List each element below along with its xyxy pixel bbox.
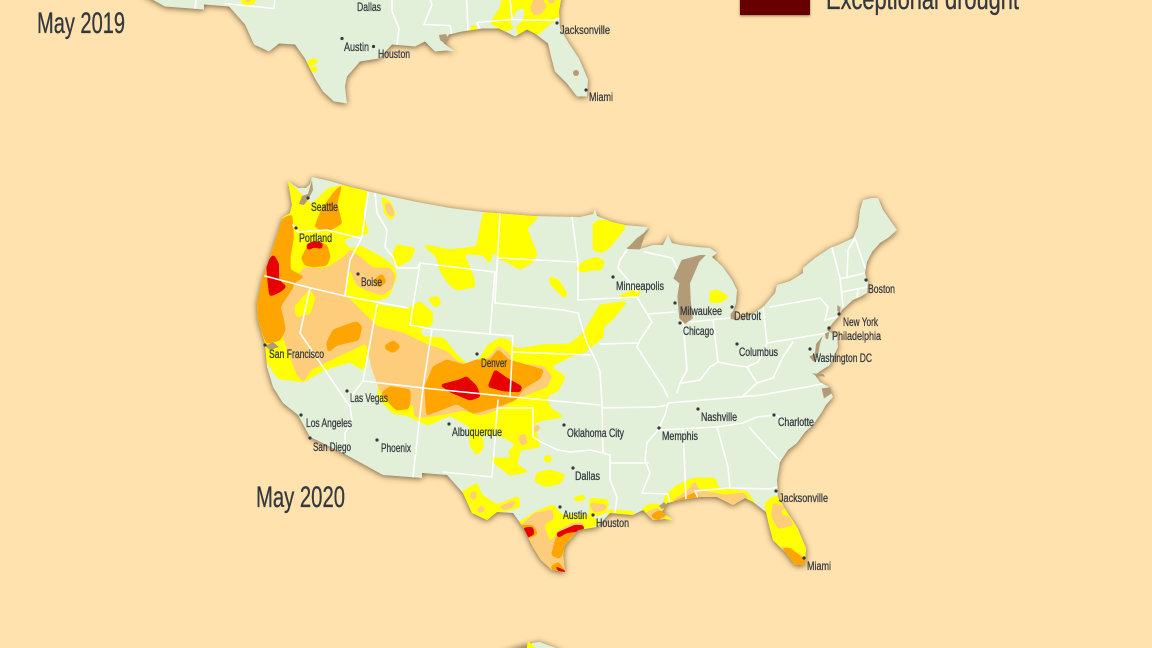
map edge: next map, top sliver bbox=[504, 638, 563, 648]
Austin bbox=[558, 505, 587, 522]
New York bbox=[837, 312, 879, 329]
2019 land shadow bbox=[39, 0, 679, 104]
Boston: Boston bbox=[868, 282, 895, 296]
map: May 2019 bbox=[142, 0, 592, 108]
Jacksonville 2019: Jacksonville bbox=[560, 23, 610, 37]
Detroit bbox=[730, 305, 762, 323]
Phoenix: Phoenix bbox=[381, 441, 411, 455]
2019 bays and lakes bbox=[439, 34, 579, 76]
Miami 2019 bbox=[584, 88, 613, 104]
2020 land outline bbox=[257, 177, 897, 572]
Portland bbox=[294, 226, 332, 245]
Dallas bbox=[571, 466, 600, 483]
Denver bbox=[475, 352, 507, 370]
Chicago bbox=[678, 321, 714, 338]
Miami: Miami bbox=[807, 559, 831, 573]
sliver shadow bbox=[500, 642, 565, 648]
2019 drought areas bbox=[241, 0, 562, 73]
Nashville bbox=[696, 407, 737, 424]
Chicago: Chicago bbox=[683, 324, 714, 338]
severe drought: orange, west bbox=[257, 215, 302, 344]
Houston: Houston bbox=[596, 516, 629, 530]
Albuquerque bbox=[447, 422, 502, 439]
city labels: May 2020 bbox=[263, 196, 895, 573]
Columbus bbox=[735, 342, 778, 359]
moderate drought: tan, west bbox=[247, 185, 552, 417]
Columbus: Columbus bbox=[739, 345, 778, 359]
Portland: Portland bbox=[299, 231, 332, 245]
Jacksonville bbox=[774, 489, 828, 505]
Phoenix bbox=[375, 438, 411, 455]
city labels: May 2019 bbox=[340, 0, 613, 104]
Seattle bbox=[306, 196, 338, 214]
legend swatch bbox=[740, 0, 810, 15]
Los Angeles bbox=[299, 413, 352, 430]
Philadelphia bbox=[827, 326, 881, 343]
2020 great lakes and bays bbox=[627, 228, 841, 398]
Houston bbox=[591, 513, 629, 530]
Seattle: Seattle bbox=[311, 200, 338, 214]
yellow: abnormally dry, west and plains bbox=[243, 177, 605, 475]
Washington DC: Washington DC bbox=[813, 351, 872, 365]
Miami bbox=[802, 556, 831, 573]
New York: New York bbox=[843, 315, 879, 329]
Houston 2019 bbox=[372, 45, 410, 61]
2020 state borders bbox=[265, 193, 867, 513]
Charlotte bbox=[772, 413, 814, 429]
San Diego bbox=[308, 436, 351, 454]
Las Vegas: Las Vegas bbox=[350, 391, 388, 405]
San Francisco bbox=[263, 343, 324, 361]
Minneapolis bbox=[611, 275, 664, 293]
southern Texas and Texas panhandle drought bbox=[460, 425, 600, 580]
Charlotte: Charlotte bbox=[778, 415, 814, 429]
Dallas: Dallas bbox=[575, 469, 600, 483]
map: May 2020 bbox=[243, 177, 897, 580]
Dallas 2019: Dallas bbox=[357, 0, 381, 14]
Houston 2019: Houston bbox=[378, 47, 410, 61]
2020 drought areas bbox=[243, 177, 810, 580]
Milwaukee bbox=[673, 301, 722, 318]
Denver: Denver bbox=[481, 356, 507, 370]
Las Vegas bbox=[345, 389, 388, 405]
Miami 2019: Miami bbox=[589, 90, 613, 104]
Boise: Boise bbox=[361, 275, 382, 289]
Austin 2019: Austin bbox=[344, 40, 369, 54]
yellow sliver bbox=[526, 641, 536, 648]
Nashville: Nashville bbox=[701, 410, 737, 424]
Gulf coast and Florida drought bbox=[590, 478, 810, 570]
Oklahoma City bbox=[562, 423, 624, 440]
Los Angeles: Los Angeles bbox=[306, 416, 352, 430]
Milwaukee: Milwaukee bbox=[680, 304, 722, 318]
Jacksonville 2019 bbox=[555, 21, 610, 37]
Puget Sound, Great Salt Lake and Mobile Bay bbox=[265, 180, 668, 509]
yellow: central plains and upper midwest bbox=[583, 220, 728, 333]
Boston bbox=[864, 278, 895, 296]
Austin 2019 bbox=[340, 37, 369, 54]
Washington DC bbox=[808, 347, 872, 365]
Oklahoma City: Oklahoma City bbox=[567, 426, 624, 440]
2020 land shadow bbox=[257, 178, 897, 573]
San Francisco: San Francisco bbox=[269, 347, 324, 361]
2019 state borders bbox=[194, 0, 560, 45]
San Diego: San Diego bbox=[313, 440, 351, 454]
Austin: Austin bbox=[563, 508, 587, 522]
extreme drought: red, west bbox=[307, 242, 322, 250]
Memphis: Memphis bbox=[662, 429, 698, 443]
2019 land outline bbox=[39, 0, 679, 104]
heading: May 2020: May 2020 bbox=[256, 481, 345, 514]
Minneapolis: Minneapolis bbox=[616, 279, 664, 293]
Boise bbox=[356, 272, 382, 289]
Memphis bbox=[657, 426, 698, 443]
Albuquerque: Albuquerque bbox=[452, 425, 502, 439]
Jacksonville: Jacksonville bbox=[779, 491, 828, 505]
legend entry: exceptional drought bbox=[740, 0, 1019, 16]
Philadelphia: Philadelphia bbox=[832, 329, 881, 343]
Detroit: Detroit bbox=[734, 309, 762, 323]
land sliver bbox=[528, 642, 562, 648]
heading: May 2019: May 2019 bbox=[37, 7, 125, 40]
